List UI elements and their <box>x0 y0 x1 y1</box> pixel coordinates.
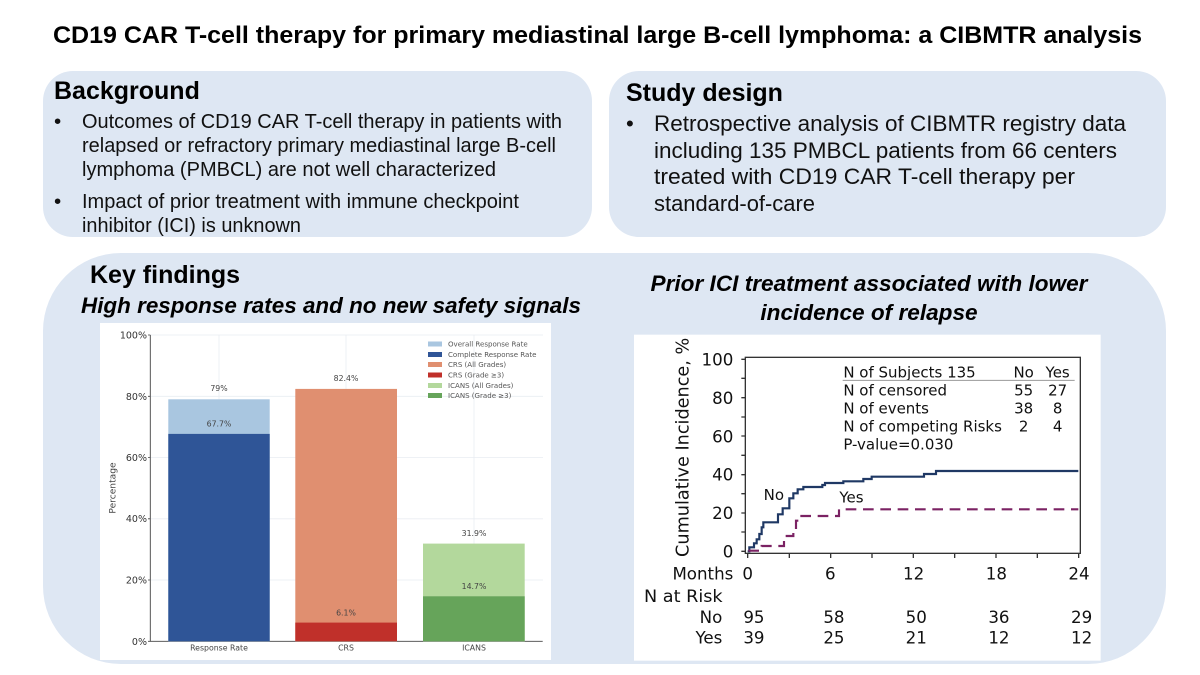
statistics table: P-value=0.030 <box>843 435 953 453</box>
heading: study design: Study design <box>626 79 783 107</box>
bars: CRS: CRS <box>338 644 354 652</box>
x axis labels: 0 <box>742 564 753 583</box>
bullet list: background <box>54 110 562 237</box>
bullet list: study design: treated with CD19 CAR T-cell therapy per <box>654 164 1076 189</box>
x axis labels: 6 <box>825 564 836 583</box>
curve labels <box>764 486 864 507</box>
numbers at risk: 29 <box>1071 608 1092 627</box>
numbers at risk: Yes <box>694 629 722 648</box>
panel: key findings <box>43 253 1166 664</box>
bullet list: study design <box>626 111 1127 216</box>
curve: no prior ICI <box>748 471 1078 551</box>
legend: Overall Response Rate <box>448 340 528 348</box>
bars: ICANS: 14.7% <box>462 582 486 591</box>
legend <box>428 340 536 400</box>
bars: response rate: 67.7% <box>207 420 231 428</box>
bullet list: study design: Retrospective analysis of CIBMTR registry data <box>654 111 1127 136</box>
y axis: 0% <box>132 637 147 648</box>
heading: background: Background <box>54 77 200 105</box>
bars: CRS: 82.4% <box>334 374 358 383</box>
bars: response rate <box>168 384 270 652</box>
y tick labels: 40 <box>712 466 733 485</box>
numbers at risk: 25 <box>823 629 845 648</box>
y tick labels: 0 <box>723 542 733 561</box>
y tick labels: 60 <box>712 427 733 446</box>
y axis label: Cumulative Incidence, % <box>674 338 694 557</box>
statistics table: 55 <box>1014 381 1033 399</box>
numbers at risk: 12 <box>1071 629 1092 648</box>
numbers at risk: 39 <box>743 629 765 648</box>
y axis <box>108 330 543 648</box>
legend: ICANS (All Grades) <box>448 381 514 390</box>
x axis labels <box>672 564 1090 583</box>
bullet list: background: lymphoma (PMBCL) are not well characterized <box>82 158 496 181</box>
bars: CRS <box>295 374 397 652</box>
bars: CRS: 6.1% <box>336 608 356 618</box>
bullet list: background: Outcomes of CD19 CAR T-cell therapy in patients with <box>82 110 562 133</box>
numbers at risk: 58 <box>823 608 845 627</box>
y axis: 100% <box>120 330 147 342</box>
numbers at risk: No <box>700 608 722 627</box>
statistics table: N of Subjects 135 <box>843 363 976 381</box>
statistics table: 38 <box>1014 399 1033 417</box>
bars: ICANS: 31.9% <box>462 529 486 538</box>
bullet list: background: relapsed or refractory primary mediastinal large B-cell <box>82 134 556 157</box>
y axis: 80% <box>126 392 147 403</box>
numbers at risk: 12 <box>988 629 1010 648</box>
statistics table: 27 <box>1048 381 1067 399</box>
statistics table: Yes <box>1045 363 1070 381</box>
bars: response rate: 79% <box>210 384 228 393</box>
legend: CRS (All Grades) <box>448 360 506 369</box>
x axis labels: 18 <box>986 564 1007 583</box>
cumulative incidence chart <box>634 335 1101 661</box>
subheading: relapse: Prior ICI treatment associated with lower <box>651 271 1089 296</box>
numbers at risk <box>644 587 1092 648</box>
y tick labels <box>702 350 733 561</box>
x axis labels: 12 <box>903 564 924 583</box>
bullet list: background: Impact of prior treatment with immune checkpoint <box>82 190 519 213</box>
statistics table <box>843 363 1075 453</box>
bar chart <box>100 323 551 660</box>
y axis: 60% <box>126 453 147 464</box>
legend: CRS (Grade ≥3) <box>448 370 504 380</box>
numbers at risk: 50 <box>906 608 927 627</box>
y axis: Percentage <box>108 462 118 514</box>
bars: ICANS <box>423 529 525 652</box>
statistics table: N of censored <box>843 381 947 399</box>
statistics table: 2 <box>1019 417 1028 435</box>
statistics table: N of competing Risks <box>843 417 1002 435</box>
bullet list: study design: • <box>626 111 634 136</box>
curve labels: Yes <box>838 489 864 507</box>
numbers at risk: 95 <box>743 608 765 627</box>
y axis: 20% <box>126 576 147 586</box>
y axis: 40% <box>126 514 147 525</box>
statistics table: No <box>1013 363 1034 381</box>
panel: background <box>43 71 592 237</box>
bullet list: study design: including 135 PMBCL patients from 66 centers <box>654 138 1117 163</box>
numbers at risk: N at Risk <box>644 587 723 606</box>
bars: response rate: Response Rate <box>190 644 248 652</box>
y tick labels: 20 <box>712 504 733 523</box>
bars: ICANS: ICANS <box>462 644 486 652</box>
statistics table: 8 <box>1053 399 1062 417</box>
bullet list: background: • <box>54 110 61 133</box>
bullet list: background: • <box>54 190 61 213</box>
plot frame and ticks <box>741 357 1080 558</box>
y tick labels: 100 <box>702 350 733 369</box>
heading: key findings: Key findings <box>90 261 240 289</box>
title: CD19 CAR T-cell therapy for primary mediastinal large B-cell lymphoma: a CIBMTR analysis <box>53 22 1142 49</box>
numbers at risk: 36 <box>988 608 1010 627</box>
bullet list: study design: standard-of-care <box>654 191 815 216</box>
x axis labels: 24 <box>1068 564 1090 583</box>
statistics table: N of events <box>843 399 929 417</box>
subheading: relapse: incidence of relapse <box>760 300 978 325</box>
x axis labels: Months <box>672 564 733 583</box>
legend: ICANS (Grade ≥3) <box>448 391 512 400</box>
subheading: relapse <box>651 271 1089 325</box>
statistics table: 4 <box>1053 417 1062 435</box>
legend: Complete Response Rate <box>448 350 536 359</box>
subheading: safety: High response rates and no new safety signals <box>81 293 581 318</box>
numbers at risk: 21 <box>906 629 927 648</box>
y tick labels: 80 <box>712 389 733 408</box>
curve labels: No <box>764 486 784 504</box>
panel: study design <box>609 71 1166 237</box>
curve: prior ICI <box>748 509 1078 551</box>
bullet list: background: inhibitor (ICI) is unknown <box>82 214 301 237</box>
